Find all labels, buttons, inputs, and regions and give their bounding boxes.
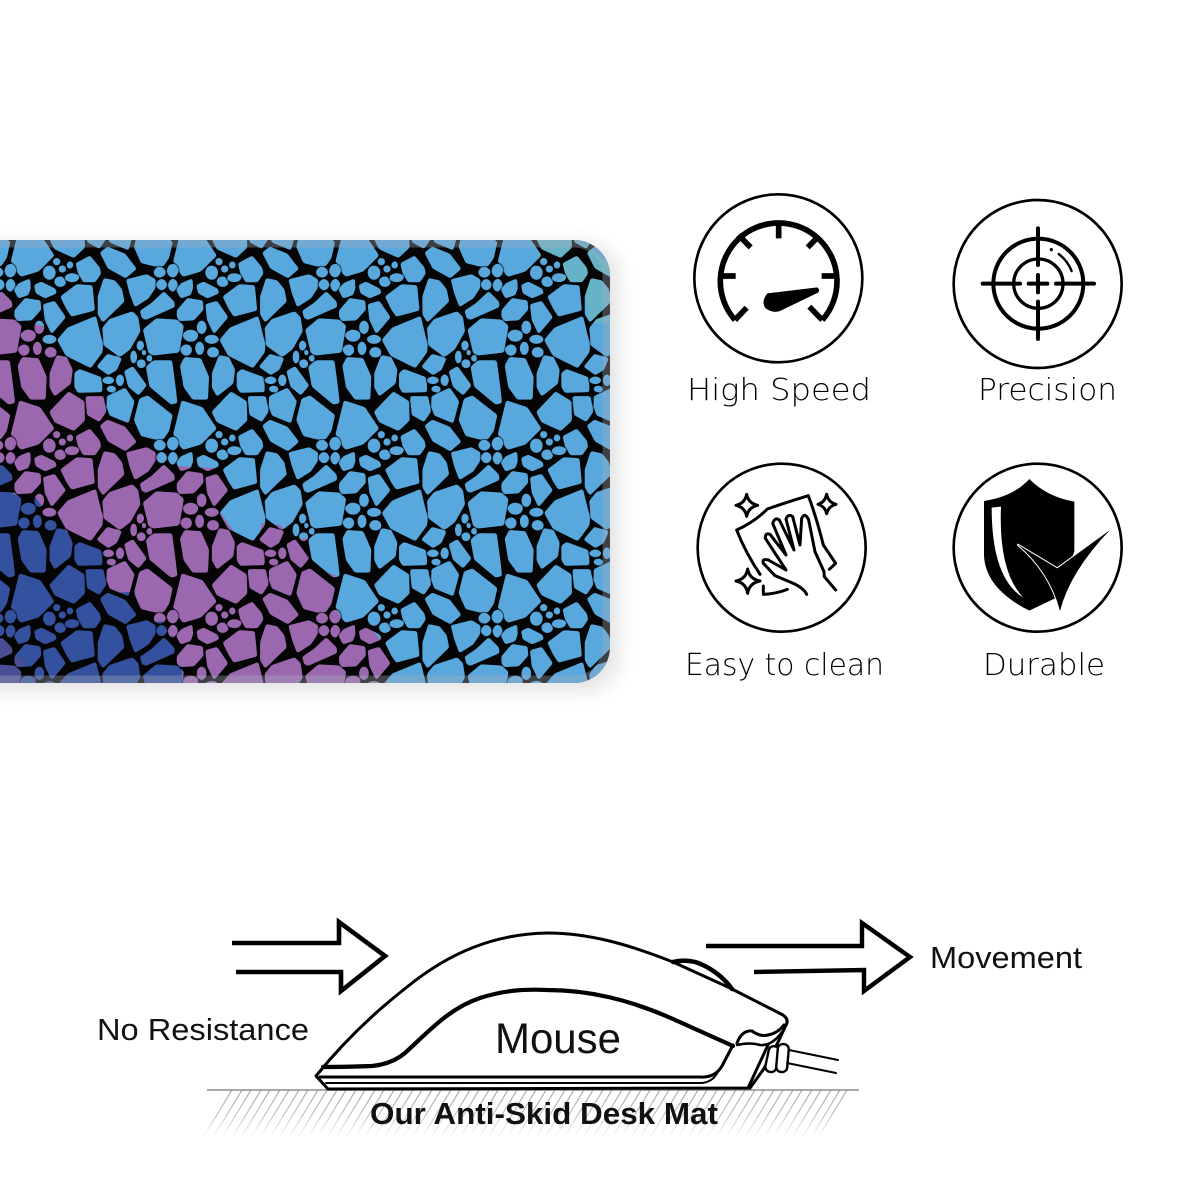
icon: durable shield with check	[954, 464, 1122, 632]
label: High Speed: High Speed	[687, 373, 871, 408]
icon: precision target	[954, 200, 1122, 368]
diagram: mouse outline	[316, 933, 838, 1089]
arrow: movement arrow	[706, 923, 910, 991]
diagram: mat surface hatching	[204, 1090, 859, 1136]
label: Easy to clean: Easy to clean	[685, 648, 884, 683]
label: No Resistance: No Resistance	[97, 1012, 309, 1047]
icon: high speed gauge	[694, 194, 862, 362]
label: Precision: Precision	[978, 373, 1117, 408]
label: Movement: Movement	[930, 940, 1082, 975]
icon: easy to clean hand and cloth	[698, 464, 866, 632]
label: Our Anti-Skid Desk Mat: Our Anti-Skid Desk Mat	[370, 1096, 718, 1131]
arrow: no resistance arrow	[232, 922, 385, 991]
stone pattern	[0, 230, 620, 690]
mat edge bevel	[0, 240, 610, 683]
label: Durable: Durable	[983, 648, 1105, 683]
mat shadow	[0, 242, 620, 692]
panel: desk mat photo	[0, 230, 620, 692]
label: Mouse: Mouse	[495, 1015, 621, 1063]
